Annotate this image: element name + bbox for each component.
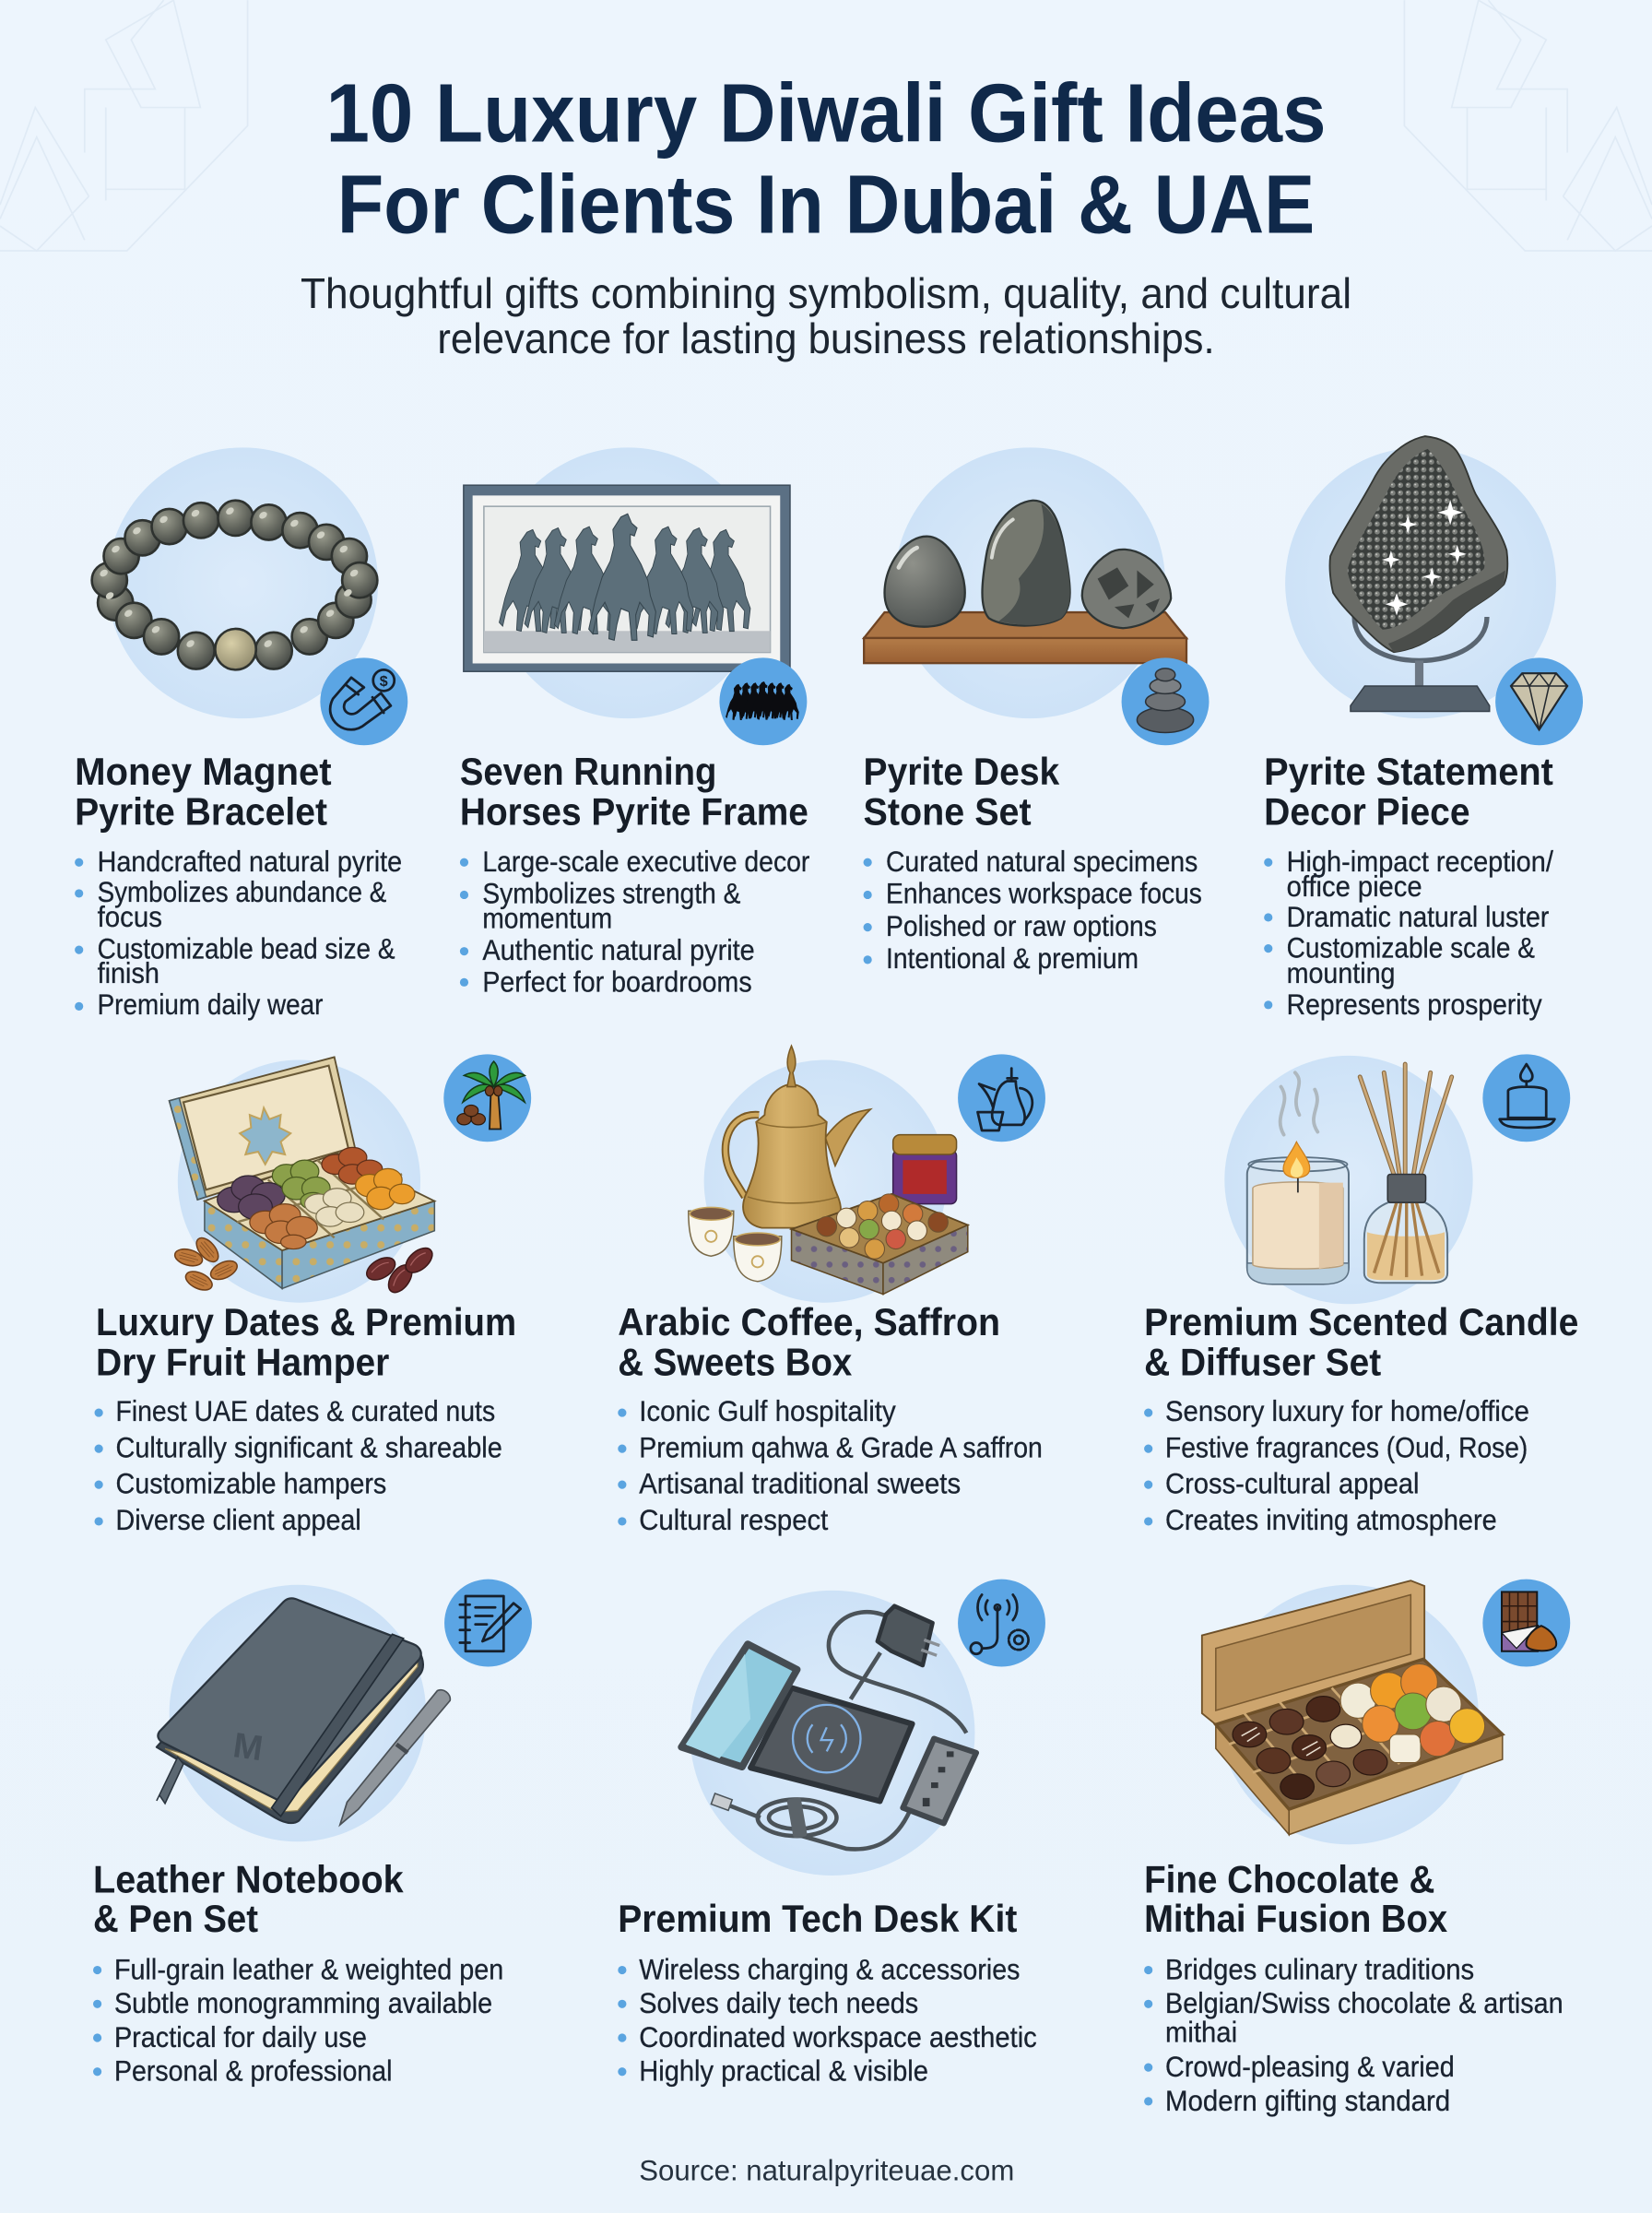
badge: chocolate bar and sweet pouch [1482, 1580, 1570, 1667]
bullet list: Authentic natural pyrite [482, 934, 755, 966]
bullet list: Solves daily tech needs [639, 1987, 918, 2019]
bullet list: Artisanal traditional sweets [639, 1467, 961, 1499]
heading: Leather Notebook [93, 1858, 404, 1900]
bullet list: momentum [482, 902, 612, 934]
illustration: dry fruit hamper box [170, 1057, 437, 1296]
bullet list: Customizable hampers [115, 1467, 386, 1499]
heading [93, 1858, 404, 1940]
bullet list: Modern gifting standard [1165, 2085, 1450, 2117]
bullet list: Bridges culinary traditions [1165, 1954, 1474, 1986]
illustration: framed seven horses [464, 485, 790, 671]
badge: notepad and pen [444, 1580, 532, 1667]
backdrop circle [690, 1591, 974, 1876]
bullet list: Cultural respect [639, 1504, 829, 1536]
illustration: pyrite rock on stand [1329, 436, 1507, 712]
bullet list: Practical for daily use [114, 2021, 367, 2053]
bullet list: Wireless charging & accessories [639, 1954, 1020, 1986]
backdrop circle [1224, 1056, 1473, 1304]
badge: diamond [1495, 657, 1583, 745]
bullet list: Perfect for boardrooms [482, 965, 752, 998]
source line: Source: naturalpyriteuae.com [639, 2155, 1014, 2187]
bullet list [1264, 846, 1553, 1021]
heading: Pyrite Statement [1264, 751, 1553, 793]
bullet list: mithai [1165, 2017, 1237, 2049]
title [326, 66, 1326, 252]
heading: Horses Pyrite Frame [460, 791, 808, 834]
bullet list: Highly practical & visible [639, 2055, 928, 2088]
bullet list: Subtle monogramming available [114, 1987, 492, 2019]
bullet list: Belgian/Swiss chocolate & artisan [1165, 1987, 1564, 2019]
illustration: notebook and pen: M [230, 1725, 266, 1769]
bullet list: finish [98, 957, 159, 989]
heading: & Pen Set [93, 1898, 258, 1940]
bullet list: Symbolizes strength & [482, 878, 740, 910]
heading: Dry Fruit Hamper [96, 1342, 389, 1384]
bullet list: Curated natural specimens [886, 846, 1198, 878]
card: Money Magnet Pyrite Bracelet [75, 447, 407, 1021]
heading [96, 1301, 516, 1384]
illustration: wireless charger, phone, hub and cables [681, 1606, 976, 1849]
heading: Seven Running [460, 751, 716, 793]
badge: coffee pot and cup [958, 1054, 1045, 1142]
badge: horses silhouette [719, 657, 807, 745]
bullet list [864, 846, 1202, 975]
bullet list [95, 1395, 502, 1536]
bullet list: Iconic Gulf hospitality [639, 1395, 896, 1427]
heading: & Diffuser Set [1144, 1342, 1381, 1384]
heading [1264, 751, 1553, 834]
backdrop circle [1285, 447, 1556, 718]
bullet list [1144, 1954, 1564, 2117]
subtitle: Thoughtful gifts combining symbolism, quality, and cultural [301, 269, 1351, 317]
bullet list: Coordinated workspace aesthetic [639, 2021, 1037, 2053]
subtitle [301, 269, 1351, 362]
bullet list: Customizable bead size & [98, 932, 395, 964]
heading: Decor Piece [1264, 791, 1470, 834]
card: Pyrite Statement Decor Piece [1264, 436, 1583, 1021]
badge: wireless and settings icon [958, 1580, 1045, 1667]
backdrop circle [170, 1585, 426, 1841]
heading: Mithai Fusion Box [1144, 1898, 1447, 1940]
card: Leather Notebook & Pen Set [93, 1580, 532, 2088]
bullet list: Finest UAE dates & curated nuts [115, 1395, 495, 1427]
bullet list: Culturally significant & shareable [115, 1431, 502, 1463]
bullet list: Festive fragrances (Oud, Rose) [1165, 1431, 1528, 1463]
heading: Premium Tech Desk Kit [618, 1898, 1018, 1940]
decorative corner pattern right [1404, 0, 1652, 251]
bullet list [460, 846, 809, 998]
heading: Pyrite Bracelet [75, 791, 327, 834]
heading: Arabic Coffee, Saffron [618, 1301, 1000, 1343]
bullet list: Dramatic natural luster [1287, 901, 1549, 933]
illustration: chocolate and mithai box [1202, 1580, 1503, 1835]
bullet list: Premium daily wear [98, 988, 323, 1021]
heading [618, 1301, 1000, 1384]
badge: candle on saucer [1482, 1054, 1570, 1142]
heading: Pyrite Desk [864, 751, 1059, 793]
bullet list: Premium qahwa & Grade A saffron [639, 1431, 1043, 1463]
card: Arabic Coffee, Saffron & Sweets Box [618, 1046, 1045, 1536]
bullet list: office piece [1287, 870, 1422, 903]
bullet list [1144, 1395, 1529, 1536]
bullet list: High-impact reception/ [1287, 846, 1553, 878]
badge: palm tree and dates [443, 1054, 531, 1142]
bullet list: Personal & professional [114, 2055, 392, 2088]
card: Pyrite Desk Stone Set [864, 447, 1209, 975]
card: Luxury Dates & Premium Dry Fruit Hamper [95, 1054, 531, 1536]
card: Fine Chocolate & Mithai Fusion Box [1144, 1580, 1570, 2117]
heading [864, 751, 1059, 834]
badge: magnet icon [320, 657, 407, 745]
heading: & Sweets Box [618, 1342, 852, 1384]
backdrop circle [492, 447, 763, 718]
heading: Luxury Dates & Premium [96, 1301, 516, 1343]
decorative corner pattern left [0, 0, 248, 251]
bullet list [75, 846, 402, 1021]
backdrop circle [107, 447, 378, 718]
title: For Clients In Dubai & UAE [337, 159, 1315, 252]
illustration: pyrite bead bracelet [92, 501, 377, 669]
heading [75, 751, 332, 834]
heading: Fine Chocolate & [1144, 1858, 1434, 1900]
heading: Money Magnet [75, 751, 332, 793]
backdrop circle [1219, 1585, 1479, 1844]
bullet list: Full-grain leather & weighted pen [114, 1954, 503, 1986]
bullet list: Cross-cultural appeal [1165, 1467, 1419, 1499]
bullet list: Customizable scale & [1287, 932, 1535, 964]
bullet list: Sensory luxury for home/office [1165, 1395, 1529, 1427]
bullet list: mounting [1287, 957, 1395, 989]
bullet list [93, 1954, 503, 2088]
bullet list: Large-scale executive decor [482, 846, 809, 878]
illustration: candle and reed diffuser [1247, 1064, 1452, 1284]
illustration: dallah, cups, saffron and sweets [689, 1046, 968, 1295]
bullet list: Enhances workspace focus [886, 878, 1202, 910]
illustration: notebook and pen [157, 1598, 450, 1825]
bullet list: Diverse client appeal [115, 1504, 361, 1536]
card: Premium Tech Desk Kit [618, 1580, 1045, 2088]
card: Premium Scented Candle & Diffuser Set [1144, 1054, 1578, 1536]
heading [1144, 1301, 1578, 1384]
bullet list: Symbolizes abundance & [98, 876, 386, 908]
badge: magnet icon: $ [380, 673, 388, 690]
bullet list [618, 1954, 1037, 2088]
badge: stacked stones [1122, 657, 1209, 745]
heading: Stone Set [864, 791, 1032, 834]
bullet list: Intentional & premium [886, 942, 1139, 975]
heading [460, 751, 808, 834]
card: Seven Running Horses Pyrite Frame [460, 447, 809, 998]
backdrop circle [704, 1059, 947, 1303]
bullet list: Crowd-pleasing & varied [1165, 2051, 1455, 2083]
title: 10 Luxury Diwali Gift Ideas [326, 66, 1326, 160]
heading: Premium Scented Candle [1144, 1301, 1578, 1343]
bullet list [618, 1395, 1043, 1536]
bullet list: Polished or raw options [886, 910, 1157, 942]
heading [1144, 1858, 1447, 1940]
illustration: three stones on wooden base [864, 501, 1186, 663]
backdrop circle [178, 1059, 420, 1303]
bullet list: Represents prosperity [1287, 988, 1542, 1021]
subtitle: relevance for lasting business relationships. [437, 314, 1215, 362]
bullet list: Handcrafted natural pyrite [98, 846, 402, 878]
bullet list: Creates inviting atmosphere [1165, 1504, 1497, 1536]
bullet list: focus [98, 901, 162, 933]
backdrop circle [894, 447, 1165, 718]
